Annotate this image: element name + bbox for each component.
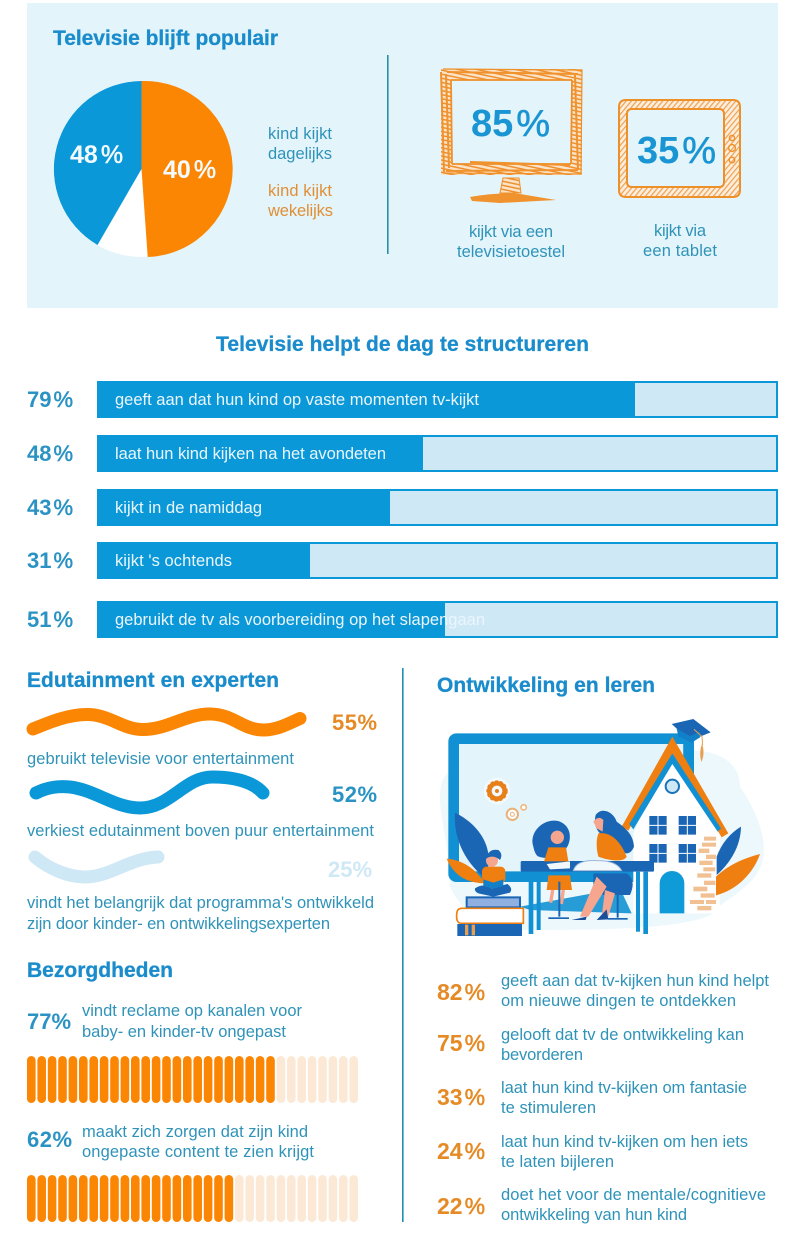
icon: gears [484, 778, 526, 820]
bar: 43%: 43% [27, 495, 73, 520]
stat: 62%: 62% [27, 1127, 72, 1152]
bar: 43% [27, 489, 777, 526]
wave bar: 55% [33, 710, 377, 735]
text: experten: zijn door kinder- en ontwikkelingsexperten [27, 915, 330, 933]
stat: 24%: 24% [437, 1138, 485, 1164]
legend: pie chart [267, 125, 333, 220]
panel: Televisie blijft populair [27, 3, 778, 308]
text: edutainment: verkiest edutainment boven puur entertainment [27, 822, 374, 840]
stat: 33%: 33% [437, 1084, 485, 1110]
wave bar: 52% [36, 777, 377, 808]
bar: 43%: kijkt in de namiddag [115, 499, 262, 517]
heading: Edutainment en experten: Edutainment en experten [27, 669, 279, 692]
stat: 22%: ontwikkeling van hun kind [501, 1206, 687, 1224]
bar: 48%: 48% [27, 441, 73, 466]
icon: television with 85%: 85% [471, 103, 550, 145]
label: kijkt via een televisietoestel: televisietoestel [457, 243, 565, 261]
stat: 24%: te laten bijleren [501, 1153, 614, 1171]
wave bar: 25% [35, 857, 372, 882]
stat: 82% [437, 972, 769, 1010]
stat: 33% [437, 1079, 747, 1117]
bar: 31%: kijkt 's ochtends [115, 552, 232, 570]
bar: 79%: geeft aan dat hun kind op vaste momenten tv-kijkt [115, 391, 479, 409]
bar: 48%: laat hun kind kijken na het avondeten [115, 445, 386, 463]
stat: 82%: geeft aan dat tv-kijken hun kind helpt [501, 972, 769, 990]
label: kijkt via een tablet: kijkt via [654, 222, 707, 240]
icon: books [457, 897, 523, 936]
bar: 79%: 79% [27, 387, 73, 412]
panel: Ontwikkeling en leren [437, 674, 769, 1224]
icon: graduation cap [672, 719, 711, 762]
icon: tablet with 35% [619, 100, 740, 197]
stat: 77% [27, 1002, 302, 1041]
heading: Televisie helpt de dag te structureren: Televisie helpt de dag te structureren [216, 333, 589, 356]
icon: house [622, 737, 728, 913]
label: kijkt via een televisietoestel: kijkt via een [469, 223, 553, 241]
stat: 75%: bevorderen [501, 1046, 583, 1064]
stat: 62%: maakt zich zorgen dat zijn kind [82, 1123, 308, 1141]
text: entertainment: gebruikt televisie voor entertainment [27, 750, 294, 768]
pill bar: 77% [27, 1056, 358, 1103]
stat: 75% [437, 1026, 744, 1064]
bar: 48% [27, 435, 777, 472]
heading: Ontwikkeling en leren: Ontwikkeling en leren [437, 674, 655, 697]
figure: woman [572, 811, 634, 920]
legend: pie chart: kind kijkt [268, 125, 332, 143]
heading: Bezorgdheden: Bezorgdheden [27, 959, 173, 982]
pill bar: 62% [27, 1175, 358, 1222]
stat: 22%: doet het voor de mentale/cognitieve [501, 1186, 766, 1204]
bar: 51% [27, 601, 777, 638]
label: kijkt via een televisietoestel [457, 223, 565, 261]
stat: 22% [437, 1186, 766, 1224]
bar: 79% [27, 381, 777, 418]
table [521, 861, 654, 934]
stat: 77%: baby- en kinder-tv ongepast [82, 1023, 286, 1041]
heading: Televisie blijft populair: Televisie blijft populair [53, 27, 278, 50]
stat: 75%: 75% [437, 1030, 485, 1056]
wave bar: 25%: 25% [328, 857, 372, 882]
bar chart: structuur van de dag [27, 381, 777, 638]
bar: 31% [27, 542, 777, 579]
stat: 77%: vindt reclame op kanalen voor [82, 1002, 302, 1020]
pie chart: daily and weekly viewing: 40% [163, 156, 216, 184]
pie chart: daily and weekly viewing [54, 81, 233, 257]
stat: 75%: gelooft dat tv de ontwikkeling kan [501, 1026, 744, 1044]
illustration: family learning in front of a house [440, 719, 764, 936]
pie chart: daily and weekly viewing: 48% [70, 141, 123, 169]
legend: pie chart: dagelijks [268, 145, 332, 163]
panel: Edutainment en experten [27, 669, 377, 933]
text: experten [27, 894, 374, 933]
stat: 33%: te stimuleren [501, 1099, 596, 1117]
legend: pie chart: wekelijks [267, 202, 333, 220]
icon: open book [547, 861, 622, 871]
stat: 33%: laat hun kind tv-kijken om fantasie [501, 1079, 747, 1097]
panel: Bezorgdheden [27, 959, 358, 1222]
icon: tablet with 35%: 35% [637, 130, 716, 172]
figure: girl [532, 821, 572, 919]
bar: 51%: gebruikt de tv als voorbereiding op het slapengaan [115, 611, 485, 629]
text: experten: vindt het belangrijk dat programma's ontwikkeld [27, 894, 374, 912]
wave bar: 55%: 55% [332, 710, 377, 735]
stat: 82%: om nieuwe dingen te ontdekken [501, 992, 736, 1010]
figure: boy reading [475, 850, 511, 897]
stat: 22%: 22% [437, 1193, 485, 1219]
icon: plants [447, 813, 760, 895]
label: kijkt via een tablet: een tablet [643, 242, 717, 260]
label: kijkt via een tablet [643, 222, 717, 260]
bar: 31%: 31% [27, 548, 73, 573]
icon: television with 85% [441, 69, 582, 203]
stat: 24% [437, 1133, 748, 1171]
stat: 77%: 77% [27, 1009, 71, 1034]
legend: pie chart: kind kijkt [268, 182, 332, 200]
stat: 82%: 82% [437, 979, 485, 1005]
stat: 62% [27, 1123, 314, 1161]
stat: 24%: laat hun kind tv-kijken om hen iets [501, 1133, 748, 1151]
wave bar: 52%: 52% [332, 782, 377, 807]
bar: 51%: 51% [27, 607, 73, 632]
stat: 62%: ongepaste content te zien krijgt [82, 1143, 314, 1161]
